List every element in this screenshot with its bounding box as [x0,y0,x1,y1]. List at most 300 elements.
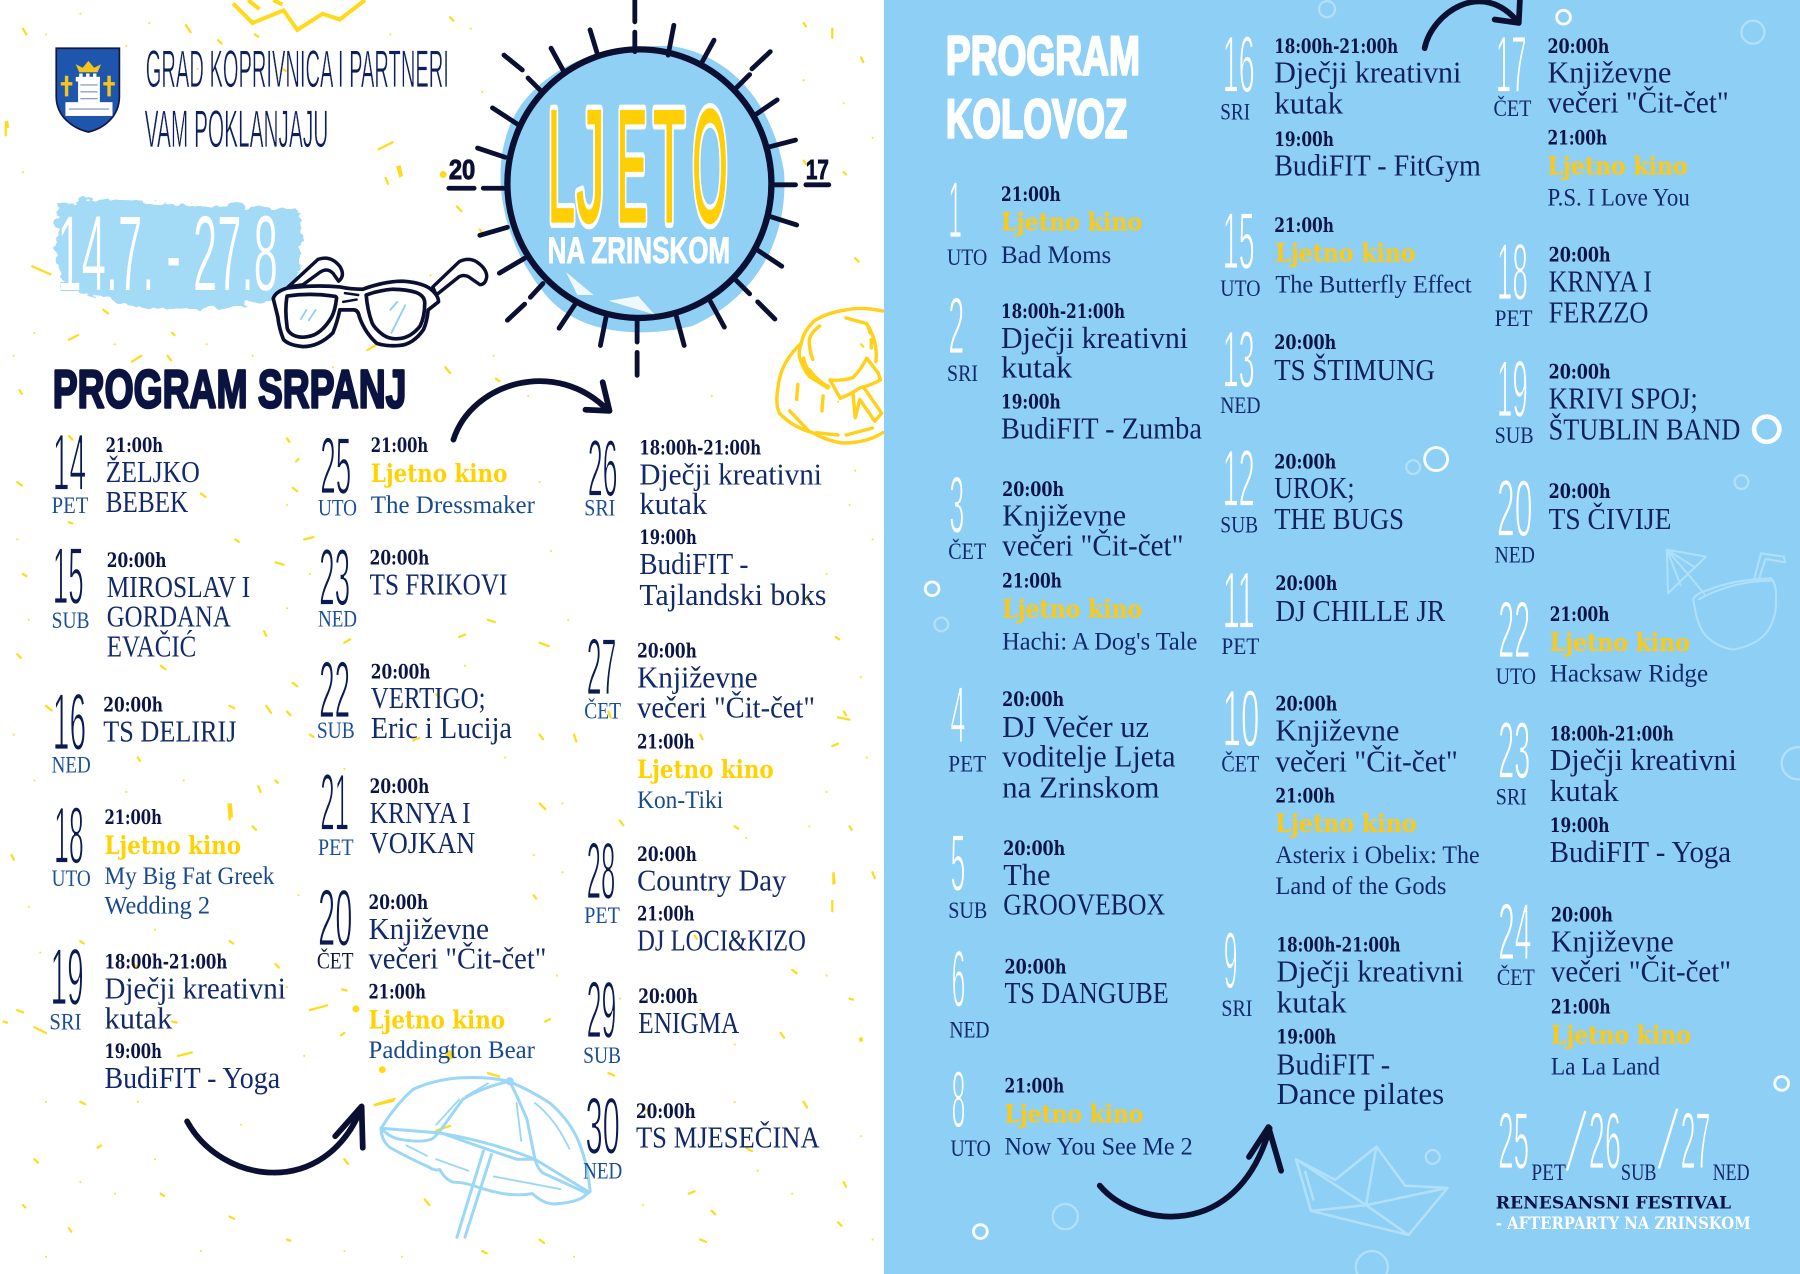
entry: 16 SRI: kutak [1274,86,1344,121]
entry: 3 ČET: ČET [948,538,986,564]
entry: 13 NED: 13 [1223,315,1255,405]
entry: 26 SRI: SRI [584,495,615,520]
entry: 28 PET: 20:00h [637,843,697,866]
entry: 20 ČET: 20 [318,874,352,964]
entry: 18 PET: 20:00h [1549,244,1611,267]
entry: 6 NED [949,935,1169,1043]
entry: 18 UTO [52,791,275,920]
entry: 11 PET: 11 [1223,556,1255,646]
entry: 4 PET: DJ Večer uz [1002,709,1149,744]
sun outline [507,49,771,318]
entry: 17 ČET: 20:00h [1547,35,1609,58]
subtitle: na Zrinskom: NA ZRINSKOM [548,230,730,271]
entry: 20 NED: NED [1495,542,1535,567]
entry: 12 SUB: 12 [1223,434,1255,524]
entry: 23 SRI [1496,706,1737,869]
entry: 17 ČET: Ljetno kino [1547,150,1687,180]
entry: 26 SRI: kutak [639,486,708,521]
entry: 2 SRI: 19:00h [1001,391,1061,414]
entry: 16 SRI: 18:00h-21:00h [1274,35,1398,58]
entry: 8 UTO: UTO [951,1136,991,1161]
entry: 9 SRI: 19:00h [1277,1025,1336,1048]
entry: 23 NED [318,533,507,632]
entry: 3 ČET: Ljetno kino [1002,593,1142,623]
entry: 16 NED: 20:00h [103,694,163,717]
entry: festival 25/26/27: 27 [1681,1096,1710,1186]
entry: 4 PET: 4 [951,671,965,761]
entry: 22 SUB: Eric i Lucija [371,710,512,745]
sun logo: Ljeto na Zrinskom [449,0,829,375]
entry: 18 UTO: 21:00h [104,806,162,829]
entry: 2 SRI [947,282,1202,445]
entry: 23 SRI: Dječji kreativni [1550,742,1737,777]
text: GRAD KOPRIVNICA I PARTNERI [146,40,449,99]
entry: 8 UTO: Ljetno kino [1004,1098,1143,1128]
icon: coconut drink [1667,550,1785,650]
entry: 19 SUB: 20:00h [1549,361,1611,384]
entry: 10 ČET: Asterix i Obelix: The [1275,841,1480,869]
entry: festival 25/26/27: - AFTERPARTY NA ZRINSKOM [1496,1214,1751,1234]
entry: 22 SUB: 20:00h [371,660,430,683]
entry: 11 PET: DJ CHILLE JR [1275,593,1446,628]
entry: 10 ČET: Književne [1275,712,1399,747]
entry: 29 SUB: ENIGMA [638,1005,740,1040]
entry: 11 PET [1221,556,1446,659]
entry: 18 UTO: 18 [54,791,84,881]
entry: 21 PET: VOJKAN [370,825,475,860]
entry: 14 PET: ŽELJKO [106,454,200,489]
column: July, third [583,424,827,1184]
entry: 17 ČET: 21:00h [1547,127,1607,150]
entry: 14 PET: PET [52,493,88,518]
arrow: to second column [1100,1127,1281,1217]
entry: 22 SUB [317,645,512,745]
entry: 16 SRI: SRI [1220,99,1250,124]
entry: 15 SUB: MIROSLAV I [107,569,250,604]
column: August, third [1493,20,1751,1234]
entry: 24 ČET [1497,888,1731,1080]
entry: 19 SUB: ŠTUBLIN BAND [1549,412,1740,447]
heading: Program Kolovoz: PROGRAM [946,25,1140,87]
panel: August program [884,0,1800,1274]
title: Ljeto: J [576,78,605,257]
entry: 27 ČET: Ljetno kino [637,754,774,784]
entry: 29 SUB: 20:00h [638,985,698,1008]
entry: 27 ČET: 21:00h [637,730,695,753]
sun logo: Ljeto na Zrinskom: O [692,78,728,257]
entry: 12 SUB: 20:00h [1274,450,1336,473]
entry: 2 SRI: kutak [1001,350,1073,385]
entry: 24 ČET: 21:00h [1551,995,1611,1018]
bubbles [925,1,1800,1274]
entry: 4 PET: 20:00h [1002,688,1064,711]
entry: 30 NED: TS MJESEČINA [636,1120,820,1155]
entry: 24 ČET: Književne [1551,923,1674,958]
entry: 5 SUB: 20:00h [1003,837,1065,860]
entry: 2 SRI: 2 [948,282,964,372]
entry: 28 PET: Country Day [637,863,787,898]
entry: 23 SRI: 23 [1498,706,1530,796]
entry: 8 UTO: 21:00h [1004,1075,1064,1098]
entry: 3 ČET: 3 [949,461,964,551]
entry: 16 NED [52,677,236,777]
entry: 9 SRI: kutak [1277,984,1347,1019]
entry: 18 UTO: Wedding 2 [104,892,210,920]
entry: 20 ČET: Paddington Bear [368,1036,536,1064]
entry: 20 NED: TS ČIVIJE [1549,501,1671,536]
entry: 19 SRI [49,932,286,1095]
entry: 14 PET: 14 [53,418,86,508]
entry: 27 ČET: Kon-Tiki [637,786,723,814]
entry: 3 ČET: Književne [1002,498,1126,533]
entry: 15 UTO: UTO [1220,276,1260,301]
entry: 26 SRI: 19:00h [639,526,697,549]
entry: 20 ČET: 21:00h [368,981,426,1004]
entry: 15 SUB: SUB [52,608,90,633]
entry: 5 SUB: The [1003,857,1050,892]
entry: 23 SRI: 19:00h [1550,814,1609,837]
entry: 14 PET [52,418,200,519]
entry: 15 SUB [52,532,250,664]
entry: 15 UTO: The Butterfly Effect [1275,271,1472,299]
entry: 22 UTO: Ljetno kino [1550,627,1690,657]
entry: 8 UTO [951,1055,1193,1161]
entry: 4 PET [948,671,1176,805]
column: July, first [49,418,286,1095]
entry: 18 PET: 18 [1497,228,1528,318]
entry: 11 PET: 20:00h [1275,572,1337,595]
entry: 16 SRI: 19:00h [1274,128,1334,151]
entry: 22 UTO: Hacksaw Ridge [1550,660,1708,688]
entry: 9 SRI: Dance pilates [1277,1076,1444,1111]
entry: 1 UTO: 1 [948,166,962,256]
entry: 11 PET: PET [1221,634,1259,659]
entry: 19 SRI: SRI [49,1010,82,1035]
entry: 10 ČET: 20:00h [1275,692,1337,715]
entry: 27 ČET: 20:00h [637,640,697,663]
entry: 24 ČET: Ljetno kino [1551,1019,1691,1049]
entry: 29 SUB [583,966,740,1068]
entry: 21 PET: 21 [320,758,349,848]
entry: 27 ČET: ČET [584,697,621,723]
entry: 30 NED: 20:00h [636,1100,696,1123]
entry: 15 SUB: GORDANA [107,599,231,634]
entry: 28 PET: PET [584,903,620,928]
entry: 20 ČET: ČET [317,948,354,974]
entry: 22 SUB: VERTIGO; [371,680,486,715]
entry: 22 UTO: 21:00h [1550,603,1609,626]
text: 14.7. - 27.8 [57,192,278,313]
entry: 18 PET: FERZZO [1549,295,1648,330]
title: Ljeto: E [616,78,647,257]
entry: 18 UTO: Ljetno kino [104,830,241,860]
arrow: to third column [1425,0,1520,48]
entry: festival 25/26/27: 26 [1589,1096,1621,1186]
entry: 9 SRI [1221,916,1464,1111]
entry: 20 NED [1495,464,1671,567]
entry: 12 SUB: UROK; [1274,470,1355,505]
icon: yellow sun hat [777,308,883,443]
sun rays [449,0,829,375]
entry: 22 SUB: 22 [319,645,350,735]
icon: yellow sun at top edge [233,0,365,30]
entry: 2 SRI: SRI [947,361,978,386]
entry: 17 ČET: 17 [1496,20,1527,110]
entry: 15 UTO: Ljetno kino [1275,238,1415,268]
entry: 23 SRI: kutak [1550,773,1619,808]
entry: 2 SRI: Dječji kreativni [1001,320,1189,355]
entry: 25 UTO: Ljetno kino [371,458,507,488]
entry: 2 SRI: 18:00h-21:00h [1001,300,1125,323]
entry: festival 25/26/27: 25 [1498,1096,1529,1186]
entry: 24 ČET: ČET [1497,964,1535,990]
entry: 9 SRI: SRI [1221,996,1252,1021]
entry: 26 SRI: Tajlandski boks [639,577,827,612]
entry: 6 NED: 20:00h [1004,955,1066,978]
entry: 13 NED: NED [1220,393,1260,418]
entry: 18 UTO: UTO [52,866,91,891]
entry: 24 ČET: 20:00h [1551,904,1613,927]
entry: 16 NED: TS DELIRIJ [103,713,236,748]
entry: 18 UTO: My Big Fat Greek [104,862,275,890]
entry: 21 PET: KRNYA I [370,795,471,830]
entry: 23 SRI: SRI [1496,785,1527,810]
entry: 26 SRI [584,424,827,612]
entry: 10 ČET: ČET [1221,750,1259,776]
entry: 6 NED: TS DANGUBE [1004,975,1169,1010]
entry: 12 SUB: SUB [1220,513,1258,538]
entry: 19 SRI: 19:00h [104,1040,162,1063]
entry: 5 SUB [948,819,1165,923]
entry: 19 SRI: kutak [104,1000,173,1035]
entry: 23 NED: 20:00h [370,547,429,570]
heading: organiser [145,40,449,159]
entry: 16 SRI [1220,20,1481,183]
entry: 14 PET: BEBEK [106,484,189,519]
entry: 27 ČET [584,622,815,814]
entry: 13 NED: 20:00h [1274,331,1336,354]
entry: 1 UTO: Ljetno kino [1001,207,1142,237]
entry: 17 ČET: večeri "Čit-čet" [1547,84,1729,119]
entry: 3 ČET: 20:00h [1002,478,1064,501]
entry: 15 SUB: EVAČIĆ [107,629,196,664]
entry: 30 NED: 30 [585,1081,620,1171]
entry: 24 ČET: La La Land [1551,1052,1660,1080]
title: Ljeto: T [653,78,685,257]
entry: 3 ČET: 21:00h [1002,570,1062,593]
entry: 5 SUB: 5 [951,819,965,909]
entry: 19 SRI: Dječji kreativni [104,971,286,1006]
entry: 10 ČET: 10 [1223,674,1259,764]
title: Ljeto: L [548,78,575,257]
entry: 29 SUB: SUB [583,1043,621,1068]
entry: 16 SRI: 16 [1223,20,1255,110]
icon: beach umbrella [381,1077,590,1237]
entry: 4 PET: voditelje Ljeta [1002,739,1176,774]
entry: 17 ČET [1493,20,1729,211]
entry: 28 PET: DJ LOCI&KIZO [637,922,806,957]
entry: 18 PET: KRNYA I [1549,264,1652,299]
entry: 5 SUB: SUB [948,898,987,923]
entry: 23 NED: NED [318,607,357,632]
title: Ljeto: E [616,78,647,257]
entry: 25 UTO: 21:00h [371,434,428,457]
entry: 14 PET: 21:00h [106,434,163,457]
column: August, second [1220,20,1481,1111]
entry: 19 SUB: KRIVI SPOJ; [1549,381,1698,416]
entry: 10 ČET: večeri "Čit-čet" [1275,743,1458,778]
entry: 19 SUB [1495,345,1740,448]
entry: 13 NED [1220,315,1435,418]
entry: festival 25/26/27 [1496,1096,1751,1234]
entry: 22 SUB: SUB [317,718,355,743]
entry: 15 UTO: 15 [1223,197,1255,287]
entry: 25 UTO: The Dressmaker [371,491,536,519]
entry: 17 ČET: Književne [1547,55,1671,90]
entry: 6 NED: 6 [952,935,965,1025]
entry: 22 UTO: UTO [1496,664,1536,689]
entry: 30 NED [583,1081,820,1184]
entry: 21 PET [318,758,475,860]
entry: 12 SUB: THE BUGS [1274,501,1404,536]
entry: 25 UTO [318,422,536,520]
entry: 23 SRI: 18:00h-21:00h [1550,722,1674,745]
entry: 1 UTO: 21:00h [1001,183,1061,206]
entry: 29 SUB: 29 [587,966,616,1056]
entry: 25 UTO: UTO [318,495,357,520]
entry: 19 SRI: 19 [51,932,84,1022]
entry: 4 PET: na Zrinskom [1002,770,1159,805]
entry: 1 UTO [947,166,1142,270]
entry: 15 UTO [1220,197,1472,301]
entry: 26 SRI: Dječji kreativni [639,456,822,491]
entry: festival 25/26/27: SUB [1621,1160,1657,1185]
entry: 21 PET: 20:00h [370,775,429,798]
entry: festival 25/26/27: PET [1531,1160,1566,1185]
title: Ljeto: L [548,78,575,257]
entry: 10 ČET: 21:00h [1275,784,1335,807]
entry: 25 UTO: 25 [320,422,351,512]
entry: 15 SUB: 15 [53,532,84,622]
entry: 13 NED: TS ŠTIMUNG [1274,352,1435,387]
arrow: to third column [453,381,610,440]
entry: 18 PET [1495,228,1652,331]
year left: 20 [449,154,475,185]
entry: 27 ČET: večeri "Čit-čet" [637,689,815,724]
entry: 2 SRI: BudiFIT - Zumba [1001,410,1202,445]
entry: 3 ČET: Hachi: A Dog's Tale [1002,628,1197,656]
entry: 9 SRI: BudiFIT - [1277,1046,1390,1081]
entry: 6 NED: NED [949,1018,990,1043]
title: Ljeto: T [653,78,685,257]
entry: 20 ČET: Književne [368,911,489,946]
entry: 28 PET: 21:00h [637,902,695,925]
entry: 19 SUB: 19 [1497,345,1528,435]
entry: 22 UTO [1496,586,1708,689]
entry: 27 ČET: Književne [637,660,758,695]
entry: 20 ČET: Ljetno kino [368,1004,505,1034]
entry: 16 SRI: Dječji kreativni [1274,55,1462,90]
title: Ljeto: J [576,78,605,257]
sun logo: Ljeto na Zrinskom: O [692,78,728,257]
entry: 30 NED: NED [583,1159,622,1184]
column: August, first [947,166,1202,1161]
entry: 3 ČET [948,461,1197,656]
entry: 17 ČET: ČET [1493,95,1531,121]
entry: 17 ČET: P.S. I Love You [1547,183,1690,211]
entry: 1 UTO: Bad Moms [1001,241,1111,269]
entry: 19 SRI: 18:00h-21:00h [104,951,227,974]
arrow: to second column [187,1106,363,1173]
entry: 8 UTO: 8 [952,1055,965,1145]
entry: 10 ČET: Land of the Gods [1275,872,1446,900]
entry: 9 SRI: 18:00h-21:00h [1277,933,1401,956]
entry: 20 NED: 20 [1497,464,1533,554]
sun disc [500,46,784,332]
entry: 28 PET [584,827,806,957]
entry: 20 ČET: 20:00h [368,891,428,914]
entry: 23 NED: 23 [319,533,350,623]
entry: 18 PET: PET [1495,306,1533,331]
entry: 9 SRI: 9 [1224,916,1238,1006]
column: July, second [317,422,546,1064]
entry: 23 SRI: BudiFIT - Yoga [1550,834,1731,869]
title: Ljeto [548,78,728,257]
entry: festival 25/26/27: NED [1713,1160,1749,1185]
entry: 26 SRI: BudiFIT - [639,546,748,581]
heading: Program Kolovoz: KOLOVOZ [946,88,1127,150]
heading: Program Srpanj: PROGRAM SRPANJ [53,359,406,419]
entry: 24 ČET: večeri "Čit-čet" [1551,953,1731,988]
entry: 10 ČET: Ljetno kino [1275,808,1417,838]
entry: 10 ČET [1221,674,1480,900]
entry: 5 SUB: GROOVEBOX [1003,887,1165,922]
entry: 23 NED: TS FRIKOVI [370,567,507,602]
entry: 26 SRI: 18:00h-21:00h [639,437,761,460]
entry: 26 SRI: 26 [588,424,618,514]
entry: 15 UTO: 21:00h [1274,214,1334,237]
entry: 16 NED: 16 [53,677,86,767]
entry: 12 SUB [1220,434,1404,538]
entry: 20 NED: 20:00h [1549,480,1611,503]
entry: 28 PET: 28 [587,827,615,917]
entry: 9 SRI: Dječji kreativni [1277,953,1464,988]
entry: 8 UTO: Now You See Me 2 [1004,1133,1193,1161]
date brush banner [56,192,302,313]
entry: 1 UTO: UTO [947,245,987,270]
entry: 19 SRI: BudiFIT - Yoga [104,1060,280,1095]
entry: 19 SUB: SUB [1495,423,1534,448]
entry: 3 ČET: večeri "Čit-čet" [1002,528,1184,563]
entry: 22 UTO: 22 [1498,586,1530,676]
entry: 16 SRI: BudiFIT - FitGym [1274,148,1481,183]
icon: sunglasses [273,258,487,347]
heading: Program Kolovoz [946,25,1140,150]
entry: 16 NED: NED [52,752,91,777]
entry: 20 ČET [317,874,546,1064]
heading: organiser: VAM POKLANJAJU [145,100,328,159]
entry: 27 ČET: 27 [587,622,616,712]
entry: 20 ČET: večeri "Čit-čet" [368,941,546,976]
icon: paper boat [1296,1147,1448,1235]
entry: 24 ČET: 24 [1498,888,1531,978]
year right: 17 [806,154,829,185]
entry: 15 SUB: 20:00h [107,549,166,572]
icon: city coat of arms [56,48,119,132]
entry: festival 25/26/27: RENESANSNI FESTIVAL [1496,1194,1731,1214]
entry: 4 PET: PET [948,751,986,776]
entry: 21 PET: PET [318,835,354,860]
